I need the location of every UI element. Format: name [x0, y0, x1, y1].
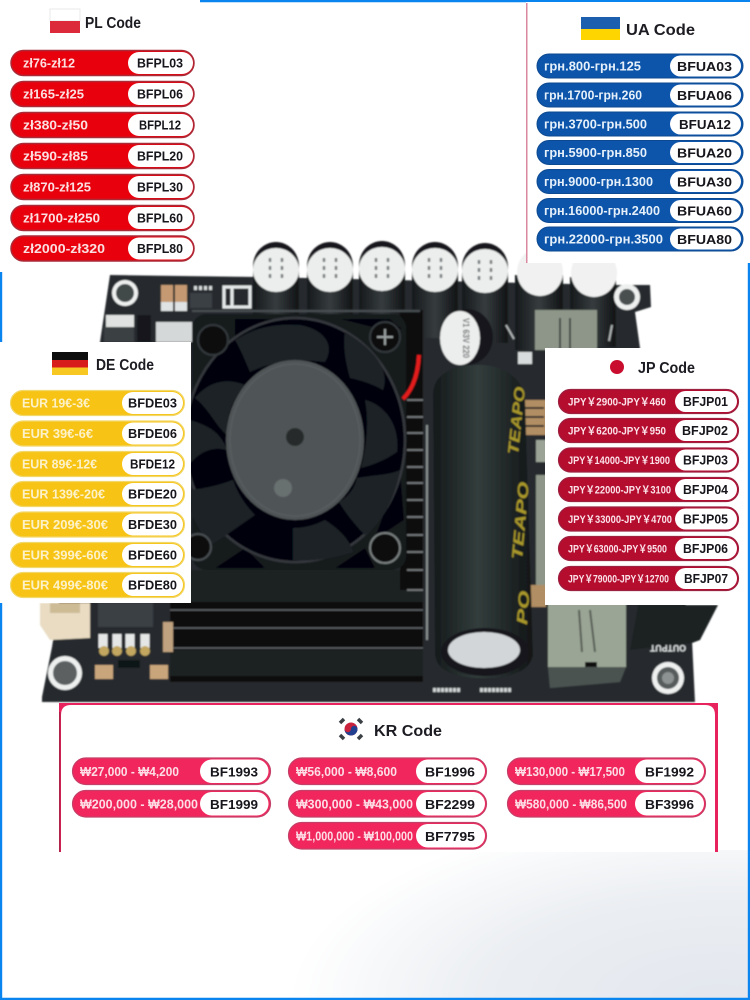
pill: BFUA30: грн.9000-грн.1300	[544, 175, 653, 189]
pill: BFJP06: JPY￥63000-JPY￥9500	[568, 544, 667, 556]
pill: BF2299	[288, 790, 486, 817]
pill: BFDE12: EUR 89€-12€	[22, 458, 97, 472]
red fan wire	[403, 355, 419, 399]
heatsink lower fins	[170, 570, 423, 682]
heading: JP Code: JP Code	[638, 360, 695, 377]
heading: DE Code: DE Code	[96, 357, 154, 374]
pill: BFUA06	[537, 83, 743, 107]
pill: BF1992: BF1992	[645, 764, 694, 780]
pill: BFPL60: zł1700-zł250	[23, 212, 100, 226]
pill: BFPL30: zł870-zł125	[23, 180, 91, 194]
Japanese flag disc	[610, 360, 624, 374]
brand text	[505, 386, 533, 625]
pill: BFUA60	[537, 198, 743, 222]
pill: BFUA30	[537, 170, 743, 194]
pill: BFJP04	[558, 478, 738, 502]
pill: BFPL80	[11, 236, 194, 261]
SMD parts top left	[104, 285, 250, 342]
pill: BFUA20: грн.5900-грн.850	[544, 146, 647, 160]
pill: BFDE03: BFDE03	[128, 396, 177, 410]
panel: DE code	[0, 342, 191, 603]
fan frame	[192, 314, 406, 570]
small capacitor	[440, 309, 493, 365]
fan hub	[226, 360, 364, 520]
pill: BFUA80: грн.22000-грн.3500	[544, 232, 663, 246]
pill: BFUA30: BFUA30	[677, 174, 732, 190]
pill: BFDE60: BFDE60	[128, 548, 177, 562]
pill: BFUA12: грн.3700-грн.500	[544, 118, 647, 132]
pill: BFJP01: JPY￥2900-JPY￥460	[568, 396, 666, 408]
pill: BFJP07	[558, 566, 738, 590]
pill: BFPL80: zł2000-zł320	[23, 242, 105, 256]
pill: BFDE20	[10, 482, 184, 506]
pill: BFJP05: JPY￥33000-JPY￥4700	[568, 514, 672, 526]
pill: BFJP01: BFJP01	[683, 394, 728, 409]
pill: BF3996: BF3996	[645, 797, 694, 812]
German flag	[52, 352, 88, 375]
pill: BFPL03: zł76-zł12	[23, 56, 75, 70]
silk markings below capacitor	[433, 688, 512, 692]
pill: BFDE20: EUR 139€-20€	[22, 488, 105, 502]
pill: BFJP05: BFJP05	[683, 512, 728, 526]
large TEAPO capacitor	[433, 365, 533, 678]
product photo: amplifier circuit board	[40, 241, 718, 702]
pill: BFUA06: BFUA06	[677, 88, 732, 103]
pill: BFJP03	[558, 448, 738, 472]
pill: BFUA03: BFUA03	[677, 59, 732, 74]
output connector block	[630, 605, 718, 650]
pill: BFDE60: EUR 399€-60€	[22, 548, 108, 562]
fan corner screws	[185, 322, 400, 563]
pill: BFDE60	[10, 542, 184, 568]
top left mounting hole	[112, 280, 138, 306]
pill: BFJP03: BFJP03	[683, 452, 728, 468]
silver trace beside heatsink	[426, 425, 428, 640]
pill: BFDE80	[10, 572, 184, 598]
pill: BF1999: BF1999	[210, 797, 258, 812]
bottom left connector	[40, 603, 90, 640]
pill: BFUA60: грн.16000-грн.2400	[544, 204, 660, 218]
pill: BF3996	[508, 790, 706, 817]
pill: BFJP02	[558, 418, 738, 442]
pill: BFPL03: BFPL03	[137, 56, 183, 70]
pill: BF1996: ₩56,000 - ₩8,600	[296, 765, 397, 779]
pill: BFDE06: EUR 39€-6€	[22, 427, 93, 441]
pill: BFPL06: BFPL06	[137, 86, 183, 102]
pill: BF1999	[72, 790, 270, 817]
pill: BF2299: BF2299	[425, 797, 475, 812]
capacitor vent top	[448, 632, 520, 668]
pill: BFDE12: BFDE12	[130, 456, 175, 472]
pill: BFDE80: BFDE80	[128, 578, 177, 592]
fan opening	[185, 318, 405, 562]
brand text: TEAPO	[509, 481, 533, 560]
pill: BF1999: ₩200,000 - ₩28,000	[80, 798, 198, 812]
pill: BFPL06: zł165-zł25	[23, 88, 84, 102]
heatsink side fins	[192, 310, 423, 590]
pill: BFDE30: EUR 209€-30€	[22, 518, 108, 532]
pill: BF7795	[288, 822, 486, 849]
Polish flag	[50, 9, 80, 33]
SMD capacitors bottom left	[95, 622, 173, 679]
copper parts right of large capacitor	[518, 352, 546, 607]
pill: BFJP04: JPY￥22000-JPY￥3100	[568, 484, 671, 496]
pill: BF1993: ₩27,000 - ₩4,200	[80, 765, 179, 779]
pill: BFJP01	[558, 390, 738, 414]
pill: BFPL60	[11, 206, 194, 230]
pill: BFUA20	[537, 140, 743, 164]
pill: BFUA80	[537, 227, 743, 251]
pill: BFJP02: BFJP02	[682, 423, 728, 438]
hub dot	[274, 479, 292, 497]
pill: BFPL12	[11, 112, 194, 138]
pill: BF7795: BF7795	[425, 829, 475, 844]
bottom left pins	[99, 634, 150, 668]
pill: BFUA12	[537, 112, 743, 136]
pill: BFDE12	[10, 452, 184, 476]
pill: BFPL03	[11, 50, 194, 76]
pill: BFDE06: BFDE06	[128, 426, 177, 441]
panel: PL code	[0, 0, 200, 272]
heading: UA Code: UA Code	[626, 22, 695, 39]
panel: UA code	[526, 2, 750, 263]
pill: BFUA12: BFUA12	[679, 117, 731, 132]
pill: BFJP05	[558, 507, 738, 531]
panel: KR code	[59, 703, 718, 852]
pill: BF7795: ₩1,000,000 - ₩100,000	[296, 830, 413, 844]
pill: BFPL80: BFPL80	[137, 241, 183, 256]
lower right inductor	[548, 603, 626, 688]
pill: BFUA03	[537, 54, 743, 78]
pill: BFDE30: BFDE30	[128, 517, 177, 532]
pill: BFJP02: JPY￥6200-JPY￥950	[568, 426, 666, 438]
pill: BF1992	[508, 758, 706, 784]
Ukrainian flag	[581, 17, 620, 40]
pill: BFDE03: EUR 19€-3€	[22, 396, 90, 410]
heading: KR Code: KR Code	[374, 723, 442, 740]
pill: BFPL12: zł380-zł50	[23, 118, 88, 132]
pill: BFUA03: грн.800-грн.125	[544, 60, 641, 74]
pill: BFDE30	[10, 512, 184, 537]
background gradient at bottom right	[2, 850, 748, 998]
pill: BF1993: BF1993	[210, 764, 258, 780]
pill: BFUA80: BFUA80	[677, 232, 732, 247]
brand text: PO	[514, 590, 533, 625]
pill: BF1993	[72, 758, 270, 784]
bottom right mounting hole	[652, 662, 684, 694]
top right mounting hole	[614, 284, 640, 310]
pill: BFUA60: BFUA60	[677, 204, 732, 218]
fan blades	[185, 325, 400, 561]
panel: JP code	[545, 348, 747, 605]
bottom left mounting hole	[48, 656, 82, 690]
hub centre screw	[286, 428, 304, 446]
pill: BFJP04: BFJP04	[683, 482, 729, 497]
heading: PL Code: PL Code	[85, 15, 141, 32]
pill: BFJP07: BFJP07	[684, 571, 728, 586]
pill: BF2299: ₩300,000 - ₩43,000	[296, 798, 413, 812]
pill: BFPL20	[11, 144, 194, 168]
pill: BFPL30: BFPL30	[137, 180, 183, 194]
pill: BFUA06: грн.1700-грн.260	[544, 88, 642, 102]
row of top capacitors	[253, 241, 617, 350]
pill: BFJP06: BFJP06	[683, 541, 728, 556]
pill: BFDE20: BFDE20	[128, 486, 177, 502]
pill: BFDE06	[10, 421, 184, 446]
pill: BFPL30	[11, 174, 194, 200]
pill: BFPL12: BFPL12	[139, 118, 181, 132]
brand text: TEAPO	[505, 386, 529, 455]
pill: BF1992: ₩130,000 - ₩17,500	[515, 765, 625, 779]
pill: BFUA20: BFUA20	[677, 146, 732, 160]
cooling fan	[185, 314, 406, 570]
pill: BFDE80: EUR 499€-80€	[22, 578, 108, 592]
pill: BFJP06	[558, 536, 738, 560]
pill: BFPL20: zł590-zł85	[23, 150, 88, 164]
board base	[42, 275, 695, 702]
South Korean flag	[340, 719, 362, 739]
pill: BF3996: ₩580,000 - ₩86,500	[515, 798, 627, 812]
small capacitor: V1 63V 220	[461, 318, 471, 358]
pill: BFPL06	[11, 82, 194, 106]
pill: BFJP03: JPY￥14000-JPY￥1900	[568, 455, 670, 467]
output label: OUTPUT	[650, 643, 686, 653]
input chip	[98, 603, 153, 627]
pill: BFJP07: JPY￥79000-JPY￥12700	[568, 574, 669, 586]
pill: BF1996: BF1996	[425, 764, 475, 780]
pill: BF1996	[288, 758, 486, 784]
upper right inductor	[535, 310, 597, 350]
frame corner cutouts	[215, 319, 404, 568]
pill: BFPL60: BFPL60	[137, 210, 183, 226]
pill: BFPL20: BFPL20	[137, 148, 183, 164]
pill: BFDE03	[10, 390, 184, 416]
